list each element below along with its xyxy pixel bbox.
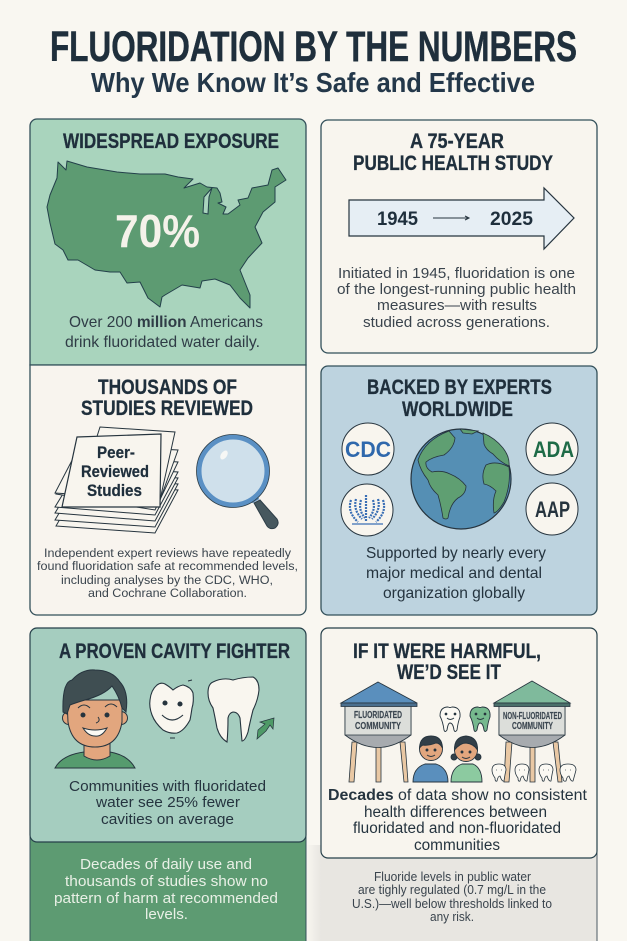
- map: United States: [47, 161, 286, 308]
- text: study description: studied across generations.: [363, 315, 550, 331]
- icon: fluoridated water tower: [341, 682, 417, 782]
- heading: widespread exposure: WIDESPREAD EXPOSURE: [63, 130, 279, 153]
- text: peer-reviewed label: Studies: [87, 481, 142, 500]
- text: studies description: Independent expert reviews have repeatedly: [44, 546, 292, 560]
- text: regulated levels: U.S.)—well below thresholds linked to: [352, 897, 552, 911]
- text: harmful description: Decades of data show no consistent: [328, 787, 588, 804]
- heading: if it were harmful: IF IT WERE HARMFUL,: [353, 640, 541, 663]
- heading: cavity fighter: A PROVEN CAVITY FIGHTER: [59, 640, 290, 663]
- heading: backed by experts: BACKED BY EXPERTS: [367, 376, 552, 399]
- panel: thousands of studies: STUDIES REVIEWED: [81, 397, 253, 420]
- icon: magnifying glass: [196, 434, 278, 529]
- panel: widespread exposure: drink fluoridated water daily.: [65, 334, 260, 351]
- text: cavity description: Communities with fluoridated: [69, 778, 266, 795]
- panel: widespread exposure: [30, 119, 306, 365]
- text: peer-reviewed label: Reviewed: [81, 462, 149, 481]
- icon: two children: [413, 736, 482, 782]
- text: studies description: [37, 546, 298, 600]
- icon: ADA badge: [526, 423, 578, 475]
- panel: fluoride levels regulated (grey band): [306, 845, 597, 941]
- arrow: timeline 1945 to 2025: 2025: [490, 209, 533, 230]
- text: peer-reviewed label: Peer-: [97, 443, 135, 462]
- text: exposure description: Over 200 million Americans: [69, 314, 263, 331]
- text: experts description: major medical and dental: [366, 565, 542, 582]
- text: no pattern of harm: pattern of harm at recommended: [54, 890, 278, 907]
- text: harmful description: fluoridated and non-fluoridated: [353, 820, 561, 837]
- text: peer-reviewed label: [81, 443, 149, 500]
- text: experts description: [366, 545, 546, 602]
- panel: backed by experts: WORLDWIDE: [402, 398, 513, 421]
- text: cavity description: cavities on average: [101, 811, 234, 828]
- icon: molar tooth: [208, 677, 259, 742]
- icon: happy tooth: [150, 680, 193, 738]
- text: study description: measures—with results: [377, 298, 537, 314]
- text: harmful description: health differences between: [364, 804, 547, 821]
- icon: non-fluoridated water tower: NON-FLUORIDATED: [503, 711, 562, 722]
- text: study description: of the longest-running public health: [337, 282, 576, 298]
- text: no pattern of harm: thousands of studies show no: [65, 873, 268, 890]
- text: studies description: found fluoridation safe at recommended levels,: [37, 559, 298, 573]
- text: study description: Initiated in 1945, fluoridation is one: [338, 266, 575, 282]
- text: regulated levels: are tighly regulated (0.7 mg/L in the: [358, 883, 546, 897]
- icon: non-fluoridated water tower: COMMUNITY: [512, 721, 553, 732]
- icon: ADA badge: ADA: [533, 437, 574, 462]
- icon: globe: [411, 429, 511, 529]
- text: harmful description: communities: [414, 837, 500, 854]
- icon: non-fluoridated water tower: [494, 681, 570, 782]
- text: experts description: organization globally: [383, 585, 525, 602]
- arrow: timeline 1945 to 2025: 1945: [377, 209, 418, 230]
- text: studies description: including analyses by the CDC, WHO,: [61, 573, 273, 587]
- panel: cavity fighter: [30, 628, 306, 842]
- text: cavity description: water see 25% fewer: [95, 794, 240, 811]
- text: regulated levels: [352, 870, 552, 924]
- text: studies description: and Cochrane Collaboration.: [88, 586, 247, 600]
- panel: backed by experts: [321, 366, 597, 615]
- text: regulated levels: Fluoride levels in public water: [374, 870, 531, 884]
- stat: 70%: 70%: [115, 205, 200, 257]
- text: experts description: Supported by nearly every: [366, 545, 546, 562]
- heading: thousands of studies: THOUSANDS OF: [98, 376, 237, 399]
- icon: paper stack: [55, 427, 178, 533]
- icon: smiling child: [55, 670, 135, 768]
- icon: AAP badge: AAP: [535, 497, 570, 522]
- panel: 75-year study: [321, 120, 597, 353]
- text: cavity description: [69, 778, 266, 828]
- icon: green arrow: [257, 718, 274, 739]
- panel: if it were harmful: WE’D SEE IT: [397, 661, 501, 684]
- text: regulated levels: any risk.: [430, 910, 474, 924]
- icon: AAP badge: [526, 483, 578, 535]
- icon: fluoridated water tower: COMMUNITY: [355, 720, 401, 732]
- text: no pattern of harm: [54, 856, 278, 923]
- icon: WHO badge: [341, 484, 393, 536]
- icon: CDC badge: [342, 423, 394, 475]
- heading: 75-year study: A 75-YEAR: [410, 130, 504, 153]
- subtitle: Why We Know It’s Safe and Effective: [91, 67, 535, 98]
- text: no pattern of harm: levels.: [145, 906, 188, 923]
- arrow: timeline 1945 to 2025: [349, 188, 574, 249]
- panel: thousands of studies: [30, 365, 306, 615]
- text: study description: [337, 266, 576, 331]
- icon: two smiling teeth: [440, 707, 490, 732]
- icon: fluoridated water tower: FLUORIDATED: [354, 709, 402, 721]
- text: harmful description: [328, 787, 588, 854]
- panel: if it were harmful: [321, 628, 597, 858]
- panel: 75-year study: PUBLIC HEALTH STUDY: [353, 152, 553, 175]
- text: no pattern of harm: Decades of daily use and: [80, 856, 252, 873]
- panel: no pattern of harm (green band): [30, 830, 306, 941]
- icon: CDC badge: CDC: [345, 437, 391, 462]
- icon: row of small teeth: [492, 764, 576, 781]
